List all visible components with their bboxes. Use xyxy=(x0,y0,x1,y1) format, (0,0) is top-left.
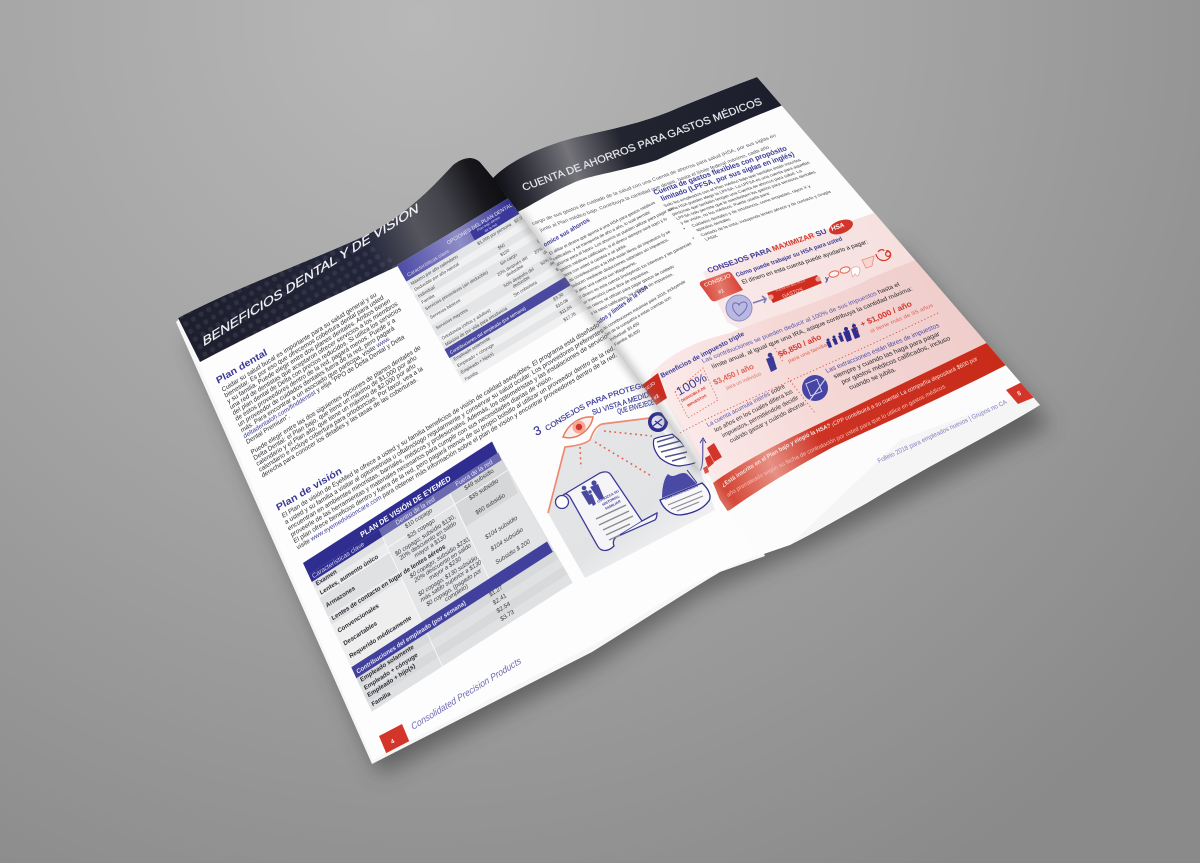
left column text: El dinero en esta cuenta (incluyendo los intereses y las ganancias xyxy=(576,241,692,300)
text: cuenta acumula interes: los años en los cuales difiera los xyxy=(713,388,794,434)
left column text xyxy=(548,202,692,315)
table: plan de vision de EyeMed: Requerido médicamente xyxy=(348,614,413,660)
icon: cup xyxy=(862,256,874,268)
table: plan de vision de EyeMed: $104 subsidio xyxy=(483,514,519,542)
table: opciones del plan dental de Delta: Sin cobertura xyxy=(512,279,538,298)
text: dental paragraph: Puede elegir entre las dos siguientes opciones de planes dentales de xyxy=(250,344,422,456)
table: plan de vision de EyeMed: Fuera de la red xyxy=(455,458,494,488)
callout: 100% deducible: 100% xyxy=(673,370,710,399)
amount: 3450 individuo: para un individuo xyxy=(725,371,763,391)
amount: 1000 mayores: + $1,000 / año xyxy=(858,299,914,329)
dotted separators xyxy=(680,312,940,433)
table: plan de vision de EyeMed: $35 subsidio xyxy=(468,477,500,502)
table: plan de vision de EyeMed: Lentes, aumento único xyxy=(319,553,380,597)
callout: 100% deducible: DEDUCIBLE DE xyxy=(680,386,707,403)
panel: consejo 1 xyxy=(650,212,1003,483)
icon: form crossed xyxy=(802,375,828,401)
callout: 100% deducible: IMPUESTOS xyxy=(686,394,708,408)
table: plan de vision de EyeMed: Dentro de la red xyxy=(395,496,436,527)
table: opciones del plan dental de Delta: Máximo de por vida para ortodoncia xyxy=(444,305,508,347)
text: dental paragraph: Delta Dental: el Plan bajo, que tiene un máximo de $1,000 por año xyxy=(253,354,418,462)
dotted connectors xyxy=(580,431,653,477)
infographic title: 3 xyxy=(531,423,544,439)
table: plan de vision de EyeMed: $49 subsidio xyxy=(463,467,496,492)
icon: scroll xyxy=(556,472,657,550)
lower left column text: Las contribuciones máximas para 2018, incluyendo xyxy=(600,279,687,332)
tag: consejo 2 xyxy=(642,373,667,408)
text: LPFSA paragraph: aparatos dentales xyxy=(694,217,732,232)
table: opciones del plan dental de Delta: $17.76 xyxy=(562,311,577,322)
table: opciones del plan dental de Delta: Características clave xyxy=(406,249,451,279)
text: las contribuciones: límite anual, al igual que una IRA, asique contribuya la cantidad máxima: xyxy=(711,286,914,370)
text: dental paragraph: derecha para conocer los detalles y las tasas de las coberturas. xyxy=(261,376,419,480)
amount: 6850 familia xyxy=(776,332,829,367)
table: plan de vision de EyeMed: más saldo superior a $130 xyxy=(419,559,483,604)
table: opciones del plan dental de Delta: deducible xyxy=(512,274,531,289)
left column text: El afiliar el dinero que aporta a una HSA para gastos médicos xyxy=(548,200,656,256)
heading: cuenta de gastos flexibles: Cuenta de gastos flexibles con propósito xyxy=(652,144,789,197)
text: dental paragraph: más. Para encontrar a un asociado que participa, visite www. xyxy=(240,335,392,434)
left header band xyxy=(178,158,518,362)
text: las extracciones: cuando se jubila. xyxy=(848,366,898,391)
text: las contribuciones: Las contribuciones se pueden deducir al 100% de sus impuestos hasta el xyxy=(700,281,901,365)
text: dental paragraph: Cuidar su salud bucal es importante para su salud general y su xyxy=(221,291,378,394)
table: plan de vision de EyeMed xyxy=(303,434,573,712)
text: como puede trabajar: Cómo puede trabajar su HSA para usted xyxy=(735,236,844,279)
text: y: y xyxy=(825,276,829,283)
icon: healthy food box xyxy=(660,470,710,515)
text: cuenta acumula interes xyxy=(705,378,808,450)
table: opciones del plan dental de Delta: $4.24 xyxy=(593,267,605,278)
table: opciones del plan dental de Delta: $3.30 xyxy=(552,291,565,302)
text: LPFSA paragraph xyxy=(664,159,832,241)
table: opciones del plan dental de Delta: $21.96 xyxy=(603,287,617,298)
icon: badge and bubble xyxy=(648,412,697,466)
text: LPFSA paragraph: LPFSA solo permite que le reembolsen los gastos para servicios dentales xyxy=(675,170,818,221)
text: LPFSA paragraph: Cuidado de la vista, incluyendo lentes aéreos y de contacto y cirugía xyxy=(699,189,832,237)
text: vision paragraph: visite www.eyemedvisioncare.com para obtener más información sobre el plan de visión y encontrar proveedores dentro de la red. xyxy=(296,351,618,552)
icon: piggy HSA: HSA xyxy=(830,222,846,233)
page number 4: 4 xyxy=(390,738,396,746)
table: opciones del plan dental de Delta: Empleado + cónyuge xyxy=(456,342,495,368)
left column text: de la salud calificados, no utilizará sin impuestos. xyxy=(587,271,674,317)
table: opciones del plan dental de Delta: OPCIONES DEL PLAN DENTAL DE DELTA xyxy=(446,189,536,247)
icon: bar chart with arrow xyxy=(698,438,722,475)
table: opciones del plan dental de Delta: Deducible por año natural xyxy=(413,261,460,292)
page stack edge xyxy=(176,318,765,764)
table: opciones del plan dental de Delta: Contribuciones del empleado (por semana) xyxy=(449,305,527,355)
table: plan de vision de EyeMed: mayor a $130 xyxy=(413,533,448,560)
table: opciones del plan dental de Delta: Plan bajo dentro xyxy=(476,215,501,232)
lower left column text: las de la compañía a estas cuentas son: xyxy=(604,294,673,337)
table: plan de vision de EyeMed: Subsidio $ 200 xyxy=(494,538,532,566)
text: LPFSA paragraph: • xyxy=(682,226,687,231)
table: opciones del plan dental de Delta: 50% después del xyxy=(540,244,572,266)
callout: red band xyxy=(713,343,1006,511)
text: vision paragraph: a usted y su familia a visitar al optometrista u oftalmólogo regularmente y conservar su salud ocular. Los proveedores preferentes por EyeMed se xyxy=(284,304,644,526)
table: opciones del plan dental de Delta: deducible xyxy=(542,241,562,255)
text: dental paragraph xyxy=(222,293,424,478)
brochure drop shadow xyxy=(190,200,1050,775)
left column text: gastos médicos calificados, si el dinero siempre será suyo y lo xyxy=(559,216,668,272)
footer: folleto: Folleto 2018 para empleados nuevos | Grupos no CA xyxy=(876,399,1009,465)
table: opciones del plan dental de Delta: 20% después del xyxy=(533,233,565,255)
table: plan de vision de EyeMed: mayor a $230 xyxy=(428,555,463,582)
ticket: fuera de bolsillo gastos xyxy=(767,275,822,303)
table: opciones del plan dental de Delta: $1,000 por persona xyxy=(476,221,513,246)
table: plan de vision de EyeMed: Contribuciones del empleado (por semana) xyxy=(355,600,467,676)
table: opciones del plan dental de Delta: $10.08 xyxy=(555,297,569,309)
table: plan de vision de EyeMed: Familia xyxy=(371,690,392,708)
text: intro: junto al Plan médico bajo. Contribuya la cantidad que desee, hasta el límite federal máximo, cada año. xyxy=(538,144,772,233)
arrow xyxy=(753,296,766,303)
table: opciones del plan dental de Delta: $150 xyxy=(499,248,511,257)
heading: beneficios de impuesto triple: Beneficios de impuesto triple xyxy=(660,331,746,380)
table: plan de vision de EyeMed: Lentes de contacto en lugar de lentes aéreos xyxy=(331,543,447,622)
table: plan de vision de EyeMed: Características clave xyxy=(311,541,366,580)
table: plan de vision de EyeMed: Descartables xyxy=(342,620,379,648)
amount: 1000 mayores xyxy=(858,292,935,337)
table: plan de vision de EyeMed: 20% descuento en saldo xyxy=(412,542,473,585)
table: opciones del plan dental de Delta: Individual xyxy=(417,285,436,299)
table: opciones del plan dental de Delta: de la red xyxy=(521,200,535,211)
table: plan de vision de EyeMed: $0 copago; subsidio $230, xyxy=(408,535,471,581)
text: dental paragraph: del plan dental de Delta con precios reducidos. Si utiliza los servicios xyxy=(232,305,403,417)
infographic title: CONSEJOS PARA PROTEGER xyxy=(546,383,644,430)
text: dental paragraph: deltadentaloh.com/finddentist y elija "PPO de Delta Dental y Delta xyxy=(242,333,406,440)
icon: piggy HSA xyxy=(829,220,853,234)
table: plan de vision de EyeMed: Examen xyxy=(315,568,338,588)
table: plan de vision de EyeMed: Convencionales xyxy=(337,602,380,635)
text: LPFSA paragraph: • xyxy=(691,236,696,240)
table: opciones del plan dental de Delta: Familia xyxy=(420,293,436,305)
table: plan de vision de EyeMed: $0 copago, (pagado por xyxy=(425,567,483,609)
table: opciones del plan dental de Delta: Empleado + hijo(s) xyxy=(460,351,495,375)
table: plan de vision de EyeMed: $3.73 xyxy=(499,608,516,623)
panel: right page xyxy=(493,77,1040,554)
heading: Beneficios dental y de vision: BENEFICIOS DENTAL Y DE VISIÓN xyxy=(200,200,421,349)
table: opciones del plan dental de Delta: deducible xyxy=(505,263,525,278)
table: opciones del plan dental de Delta: $13.72 xyxy=(595,273,610,285)
text: intro: cargo de sus gastos de cuidado de la salud con una Cuenta de ahorros para salud (HSA, por sus siglas en xyxy=(531,133,778,227)
table: opciones del plan dental de Delta xyxy=(397,198,588,384)
table: plan de vision de EyeMed: $0 copago; subsidio $130, xyxy=(394,513,457,558)
table: opciones del plan dental de Delta: $11.04 xyxy=(559,304,573,315)
table: opciones del plan dental de Delta: de la red xyxy=(484,223,498,233)
table: opciones del plan dental de Delta: $1,000 xyxy=(555,261,569,272)
table: opciones del plan dental de Delta: $50 xyxy=(534,220,543,229)
text: dental paragraph: y su familia. Puede elegir entre dos planes dentales. Ambos tienen xyxy=(226,297,392,405)
table: opciones del plan dental de Delta: Máximo por año calendario xyxy=(410,254,459,286)
text: vision paragraph: proveerle de las herramientas y materiales necesarios para cumplir con sus necesidades diarias de visión. xyxy=(290,374,554,539)
amount: 6850 familia: $6,850 / año xyxy=(776,332,823,359)
left column text: Si abre una cuenta con Wageworks. xyxy=(573,260,637,295)
icon: healthy food box: COMA SALUDABLEMENTE xyxy=(664,484,699,501)
heading: Plan dental: Plan dental xyxy=(215,347,269,387)
tag: consejo 2: SEJO xyxy=(644,380,656,392)
tag: consejo 1 xyxy=(700,272,743,301)
table: opciones del plan dental de Delta: deducible xyxy=(549,252,568,267)
heading: Plan de vision: Plan de visión xyxy=(275,465,344,514)
text: LPFSA paragraph: LASIK xyxy=(703,234,719,241)
text: las extracciones: siempre y cuando las haga para pagar xyxy=(832,331,942,380)
table: opciones del plan dental de Delta: Ortodoncia (niños y adultos) xyxy=(441,307,492,341)
table: opciones del plan dental de Delta: Servicios preventivos (sin deducible) xyxy=(424,269,489,311)
text: LPFSA paragraph: Solo los empleados con el Plan médico bajo que también están inscritos xyxy=(662,157,803,208)
table: opciones del plan dental de Delta: $2,000 por persona xyxy=(513,199,549,224)
amount: 3450 individuo xyxy=(711,361,763,395)
heading: aportes y limites: ndos y límites de la HSA xyxy=(595,284,649,327)
table: plan de vision de EyeMed: Empleado solamente xyxy=(359,643,415,684)
icon: family xyxy=(826,324,860,348)
table: opciones del plan dental de Delta: 20% después del xyxy=(496,255,528,277)
table: opciones del plan dental de Delta: Plan alto dentro xyxy=(514,194,537,210)
icon: eye xyxy=(563,417,593,438)
amount: 3450 individuo: $3,450 / año xyxy=(711,362,756,387)
amount: 1000 mayores: si tiene más de 55 años xyxy=(869,303,935,335)
text: vision paragraph: encuentran en ambientes minoristas, barriales, médicos y profesionales. Además, los optometristas y las instalaciones de servicios tendrán a su xyxy=(287,311,644,533)
lower left column text: Individual: $3,450 xyxy=(609,321,641,342)
table: plan de vision de EyeMed: $1.27 xyxy=(488,584,504,599)
infographic title: SU VISTA A MEDIDA xyxy=(591,389,655,417)
table: plan de vision de EyeMed: $0 copago; $130 subsidio, xyxy=(416,554,480,599)
gutter shadow xyxy=(518,212,700,470)
text: dental paragraph: una red de dentistas que aceptaron ofrecer servicios a los miembros xyxy=(229,300,399,411)
page number 5 xyxy=(1006,382,1035,404)
text: las extracciones: por gastos médicos calificados, incluso xyxy=(840,335,952,386)
table: opciones del plan dental de Delta: Empleado solamente xyxy=(452,335,492,362)
tag: consejo 2: #2 xyxy=(653,393,661,402)
panel: consejo 2 triple tax xyxy=(642,282,1006,511)
icon: tooth xyxy=(851,267,860,277)
infographic: 3 consejos vista xyxy=(534,383,715,578)
soft highlight along right page fold xyxy=(650,400,758,553)
table: plan de vision de EyeMed: PLAN DE VISIÓN DE EYEMED xyxy=(359,473,453,539)
text: las extracciones: Las extracciones están libres de impuestos xyxy=(824,322,941,375)
icon: scroll: FAMILIAR xyxy=(605,499,622,511)
callout: 100% deducible xyxy=(673,368,718,418)
table: opciones del plan dental de Delta: $150 xyxy=(536,225,548,235)
heading: economice sus ahorros: omice sus ahorros xyxy=(542,217,592,249)
heading: cuenta de gastos flexibles: limitado (LPFSA, por sus siglas en inglés) xyxy=(659,150,796,203)
icon: stethoscope xyxy=(876,250,891,261)
lower page shading xyxy=(1034,398,1038,402)
infographic title: QUE ENVEJECE xyxy=(616,397,655,416)
left column text: deducen mediante deducciones salariales sin impuestos. xyxy=(569,237,670,289)
text: dental paragraph: un proveedor de cuidados dentales fuera de la red, pero pagará xyxy=(237,325,396,429)
table: plan de vision de EyeMed: Empleado + hijo(s) xyxy=(366,663,416,699)
text: LPFSA paragraph: Cuidados dentales y de ortodoncia, como empastes, rayos X y xyxy=(690,184,812,228)
footer: company name: Consolidated Precision Products xyxy=(410,655,523,733)
left column text: Los retiros se utilizan para pagar gastos de cuidado xyxy=(584,264,675,311)
icon: scroll: HISTORIAL xyxy=(602,494,621,507)
text: LPFSA paragraph: personas que también tengan una Cuenta de ahorros para salud. La xyxy=(671,169,804,216)
table: opciones del plan dental de Delta: Sin cargo xyxy=(536,230,555,244)
icon: heart circle xyxy=(726,295,752,321)
table: plan de vision de EyeMed: $2.41 xyxy=(492,592,508,607)
text: dental paragraph: calendario y el Plan alto, que tiene un máximo de $2,000 por año xyxy=(255,362,417,468)
icon: glasses xyxy=(828,266,851,278)
table: opciones del plan dental de Delta: 50% después del xyxy=(503,266,535,288)
lower left column text: Familia: $6,850 xyxy=(613,328,642,347)
text: cuenta acumula interes: impuestos, permitiéndole decidir xyxy=(721,395,800,439)
ticket: fuera de bolsillo gastos: GASTOS xyxy=(782,287,804,300)
text: LPFSA paragraph: y de visión, no los médicos. Puede usarla para: xyxy=(679,191,771,225)
gray house background xyxy=(548,418,715,578)
table: opciones del plan dental de Delta: Sin cargo xyxy=(499,252,518,266)
tag: consejo 1: CONSEJO xyxy=(703,273,732,289)
text: dental paragraph: de estos proveedores dentro de la red, pagará menos. Puede ir a xyxy=(234,317,397,423)
table: plan de vision de EyeMed: $60 subsidio xyxy=(475,492,507,517)
text: cuenta acumula interes: cuándo gastar y cuándo ahorrar. xyxy=(728,400,808,445)
table: plan de vision de EyeMed: Armazones xyxy=(325,585,357,609)
page number 4 xyxy=(379,724,410,755)
icon: scroll: CONOZCA SU xyxy=(597,489,620,504)
left column text: lleva con usted si cambia o se jubila. xyxy=(562,243,628,278)
left column text: por inversión) crece libre de impuestos. xyxy=(580,269,650,306)
table: plan de vision de EyeMed: completo) xyxy=(444,583,469,604)
left column text: Las contribuciones a la HSA están libres de impuestos (y se xyxy=(566,229,672,284)
table: opciones del plan dental de Delta: $14.16 xyxy=(599,280,613,291)
table: opciones del plan dental de Delta: $50 xyxy=(497,242,506,251)
table: opciones del plan dental de Delta: Servicios básicos xyxy=(429,297,462,320)
tag: consejo 1: #1 xyxy=(717,288,725,296)
text: dental paragraph: Dental Premium". xyxy=(245,413,291,446)
heading: consejos para maximizar: CONSEJOS PARA MAXIMIZAR SU xyxy=(705,227,829,275)
ticket: fuera de bolsillo gastos: FUERA DE BOLSILLO xyxy=(775,278,806,293)
table: plan de vision de EyeMed: $25 copago xyxy=(406,517,437,541)
table: plan de vision de EyeMed: 20% descuento en saldo xyxy=(398,519,458,562)
text: vision paragraph: El Plan de visión de EyeMed le ofrece a usted y su familia beneficios de visión de calidad asequibles. El programa está diseñado para animarlo xyxy=(281,300,636,520)
left page paper xyxy=(178,160,775,760)
text: las extracciones xyxy=(824,321,956,396)
text: cuenta acumula interes: La cuenta acumula interés sobre xyxy=(705,383,787,429)
right page paper xyxy=(490,70,1045,570)
callout: red band: ¿Está inscrito en el Plan bajo y elegió la HSA? ¡CPP contribuirá a su cuenta! La compañía depositará $600 por xyxy=(722,357,977,488)
table: plan de vision de EyeMed: $2.54 xyxy=(496,600,512,615)
table: plan de vision de EyeMed: $104 subsidio xyxy=(489,526,525,553)
text: LPFSA paragraph: en la HSA pueden elegir la LPFSA. La LPFSA es una cuenta para aquellas xyxy=(666,160,812,212)
panel: left page xyxy=(178,158,754,754)
orange outline xyxy=(548,418,650,513)
icon: person xyxy=(766,353,777,372)
heading: Cuenta de ahorros: CUENTA DE AHORROS PARA GASTOS MÉDICOS xyxy=(520,95,764,194)
text: el dinero: El dinero en esta cuenta puede ayudarlo a pagar: xyxy=(740,239,870,286)
text: vision paragraph: El plan ofrece beneficios dentro y fuera de la red, pero pagará menos de su propio bolsillo al utilizar un proveedor dentro de la red. xyxy=(293,344,616,545)
left column text: ahorrar para el futuro. Los ahorros se pueden utilizar para pagar sus xyxy=(555,205,675,267)
amount: 6850 familia: para una familia xyxy=(787,342,829,365)
table: plan de vision de EyeMed: $10 copago xyxy=(404,507,434,530)
text: dental paragraph: bienestar. Es por eso que ofrecemos cobertura dental para usted xyxy=(224,294,385,400)
right header band xyxy=(493,77,783,212)
table: opciones del plan dental de Delta: Servicios mayores xyxy=(435,307,469,330)
text: dental paragraph: calendario e incluye cobertura para ortodoncias. Por favor, vea a la xyxy=(258,365,424,474)
left column text: calificados, y se transporta de año a año, lo cual permite xyxy=(551,210,651,261)
table: opciones del plan dental de Delta: Familia xyxy=(464,370,479,382)
page number 5: 5 xyxy=(1017,391,1023,398)
table: plan de vision de EyeMed: Empleado + cónyuge xyxy=(363,651,419,692)
callout: red band: año prorrateado según su fecha de contratación por usted para que lo utilice en gastos médicos. xyxy=(727,385,946,497)
